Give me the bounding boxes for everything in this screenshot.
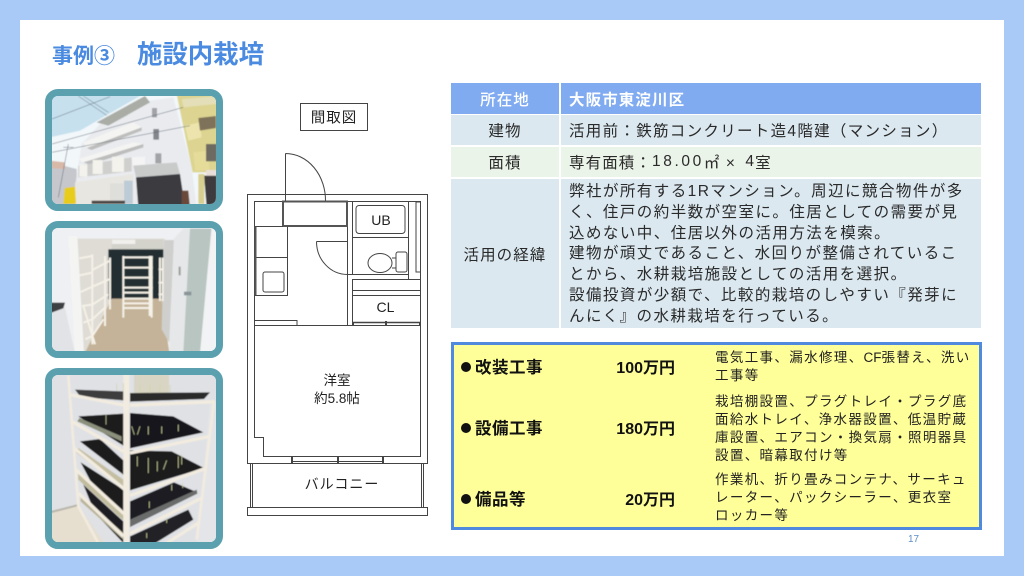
floor plan label xyxy=(300,104,368,130)
row: background text: く、住戸の約半数が空室に。住居としての需要が見 xyxy=(569,204,958,221)
row: building value xyxy=(561,115,981,145)
row: area value xyxy=(561,147,981,177)
bullet xyxy=(461,494,471,504)
equipment amount: 180万円 xyxy=(616,421,675,438)
walls xyxy=(248,194,428,464)
supplies amount: 20万円 xyxy=(625,492,675,509)
row: area label xyxy=(451,147,559,177)
entry closet xyxy=(283,202,347,226)
renovation details: 電気工事、漏水修理、CF張替え、洗い xyxy=(715,350,971,365)
equipment details xyxy=(715,394,967,463)
supplies details xyxy=(715,472,967,523)
row: location value xyxy=(561,83,981,114)
photo: building exterior xyxy=(45,89,223,211)
row: background label: 活用の経緯 xyxy=(463,246,546,264)
supplies details: ロッカー等 xyxy=(715,508,789,523)
row: background label xyxy=(451,179,559,328)
title: 事例③ 施設内栽培 xyxy=(52,41,264,69)
row: area value: 18.00 xyxy=(652,153,704,170)
page number: 17 xyxy=(908,534,919,545)
cost: equipment xyxy=(461,394,967,463)
renovation amount: 100万円 xyxy=(616,360,675,377)
row: background text: とから、水耕栽培施設としての活用を選択。 xyxy=(569,266,908,283)
kitchen xyxy=(254,226,297,326)
row: background text: 込めない中、住居以外の活用方法を模索。 xyxy=(569,225,891,242)
equipment details: 庫設置、エアコン・換気扇・照明器具 xyxy=(715,430,967,445)
supplies label: 備品等 xyxy=(475,491,526,509)
slim storage xyxy=(416,202,420,272)
bullet xyxy=(461,423,471,433)
cost box xyxy=(451,342,982,530)
floor plan xyxy=(247,103,428,516)
equipment details: 設置、暗幕取付け等 xyxy=(715,448,849,463)
entrance door xyxy=(286,154,326,202)
closet xyxy=(348,274,420,325)
row: location label xyxy=(451,83,559,114)
property table xyxy=(451,83,981,328)
closet: CL xyxy=(377,299,395,315)
unit bath xyxy=(352,206,408,238)
supplies details: 作業机、折り畳みコンテナ、サーキュ xyxy=(715,472,967,487)
photo: interior room with shelves xyxy=(45,221,223,358)
row: background text: 建物が頑丈であること、水回りが整備されているこ xyxy=(569,245,958,262)
photo: sprouts on hydroponic racks xyxy=(45,368,223,549)
row: building label: 建物 xyxy=(488,123,522,140)
floor plan label: 間取図 xyxy=(311,110,357,126)
row: area value: 専有面積： ㎡ × 室 xyxy=(569,155,772,172)
row: building label xyxy=(451,115,559,145)
cost: renovation xyxy=(461,350,971,383)
row: location label: 所在地 xyxy=(480,92,530,108)
living room label: 洋室 xyxy=(324,373,350,388)
equipment details: 栽培棚設置、プラグトレイ・プラグ底 xyxy=(715,394,967,409)
bullet xyxy=(461,362,471,372)
equipment label: 設備工事 xyxy=(475,420,543,438)
balcony xyxy=(248,464,428,516)
equipment details: 面給水トレイ、浄水器設置、低温貯蔵 xyxy=(715,412,967,427)
row: background text: 設備投資が少額で、比較的栽培のしやすい『発芽に xyxy=(569,287,958,304)
renovation details xyxy=(715,350,971,383)
row: area value: 4 xyxy=(745,153,755,170)
supplies details: レーター、パックシーラー、更衣室 xyxy=(715,490,952,505)
toilet door xyxy=(316,242,352,274)
row: background text: 弊社が所有する1Rマンション。周辺に競合物件が多 xyxy=(569,183,964,200)
toilet xyxy=(368,252,407,272)
row: background text: んにく』の水耕栽培を行っている。 xyxy=(569,308,839,325)
unit bath: UB xyxy=(371,212,391,228)
row: background text xyxy=(561,179,981,328)
row: area label: 面積 xyxy=(488,155,522,172)
renovation label: 改装工事 xyxy=(475,359,543,377)
balcony window xyxy=(292,456,383,463)
row: location value: 大阪市東淀川区 xyxy=(569,92,685,108)
balcony: バルコニー xyxy=(305,476,379,492)
living room size: 約5.8帖 xyxy=(314,391,360,406)
row: building value: 活用前：鉄筋コンクリート造4階建（マンション） xyxy=(569,123,949,140)
cost: supplies xyxy=(461,472,967,523)
renovation details: 工事等 xyxy=(715,368,760,383)
